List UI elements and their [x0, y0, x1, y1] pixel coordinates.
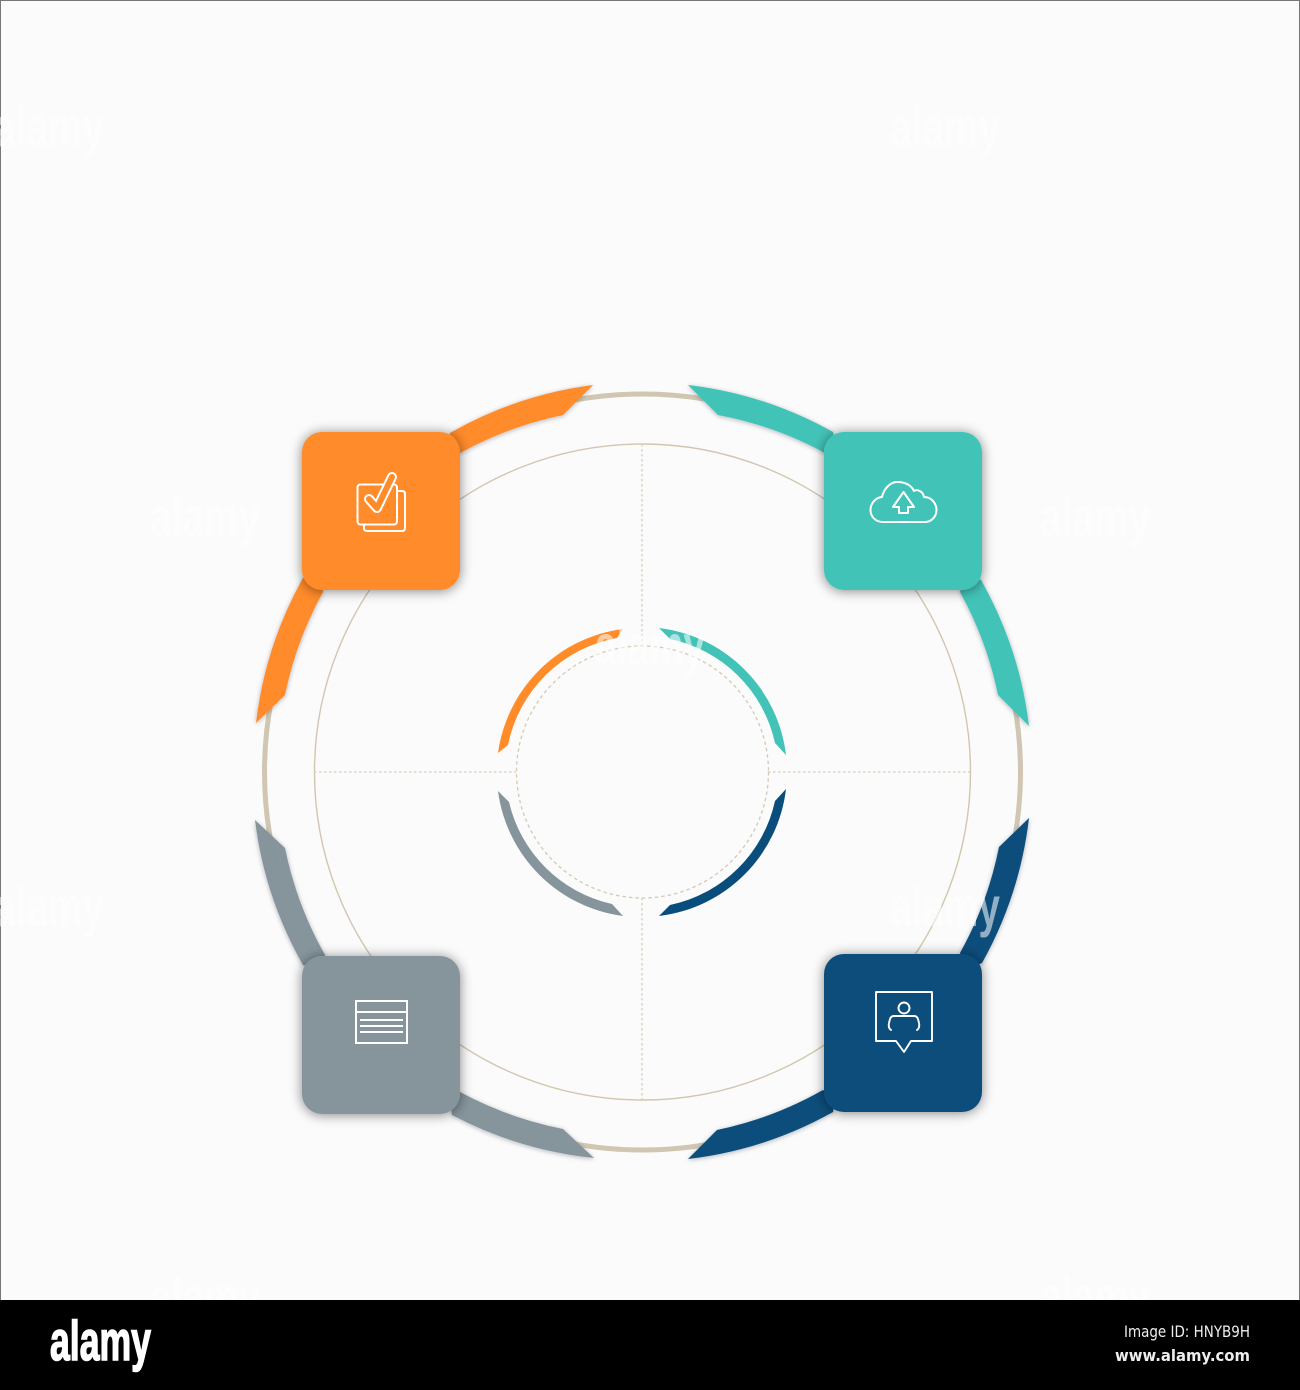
watermarks: alamy [150, 1265, 260, 1328]
card: teal [824, 432, 982, 590]
watermarks: alamy [890, 875, 1000, 938]
dashed quadrant dividers [314, 444, 970, 1100]
outer arrows: teal [688, 385, 1029, 726]
icon: person speech bubble [876, 992, 932, 1052]
outer arrows: navy [688, 818, 1029, 1159]
outer ring [264, 394, 1020, 1150]
inner arc: orange [498, 629, 623, 753]
footer image id: Image ID: HNYB9H [1124, 1322, 1250, 1341]
inner arc: navy [659, 789, 786, 916]
inner arc: grey [498, 791, 623, 916]
watermarks: alamy [1040, 485, 1150, 548]
inner arc: teal [659, 628, 786, 755]
watermarks [0, 95, 1150, 1328]
icon: checkbox [358, 477, 405, 531]
outer arrows: grey [255, 820, 594, 1158]
icon: text list [356, 1001, 407, 1043]
watermarks: alamy [1040, 1265, 1150, 1328]
footer url: www.alamy.com [1115, 1346, 1250, 1365]
outer arrows: orange [256, 385, 593, 723]
inner dashed circle [516, 646, 768, 898]
watermarks: alamy [150, 485, 260, 548]
card: navy [824, 954, 982, 1112]
card: grey [302, 956, 460, 1114]
watermarks: alamy [890, 95, 1000, 158]
middle circle [314, 444, 970, 1100]
footer bar [0, 1300, 1300, 1390]
watermarks: alamy [595, 613, 705, 676]
icon: cloud upload [870, 482, 936, 522]
card: orange [302, 432, 460, 590]
footer logo: alamy [50, 1309, 151, 1372]
